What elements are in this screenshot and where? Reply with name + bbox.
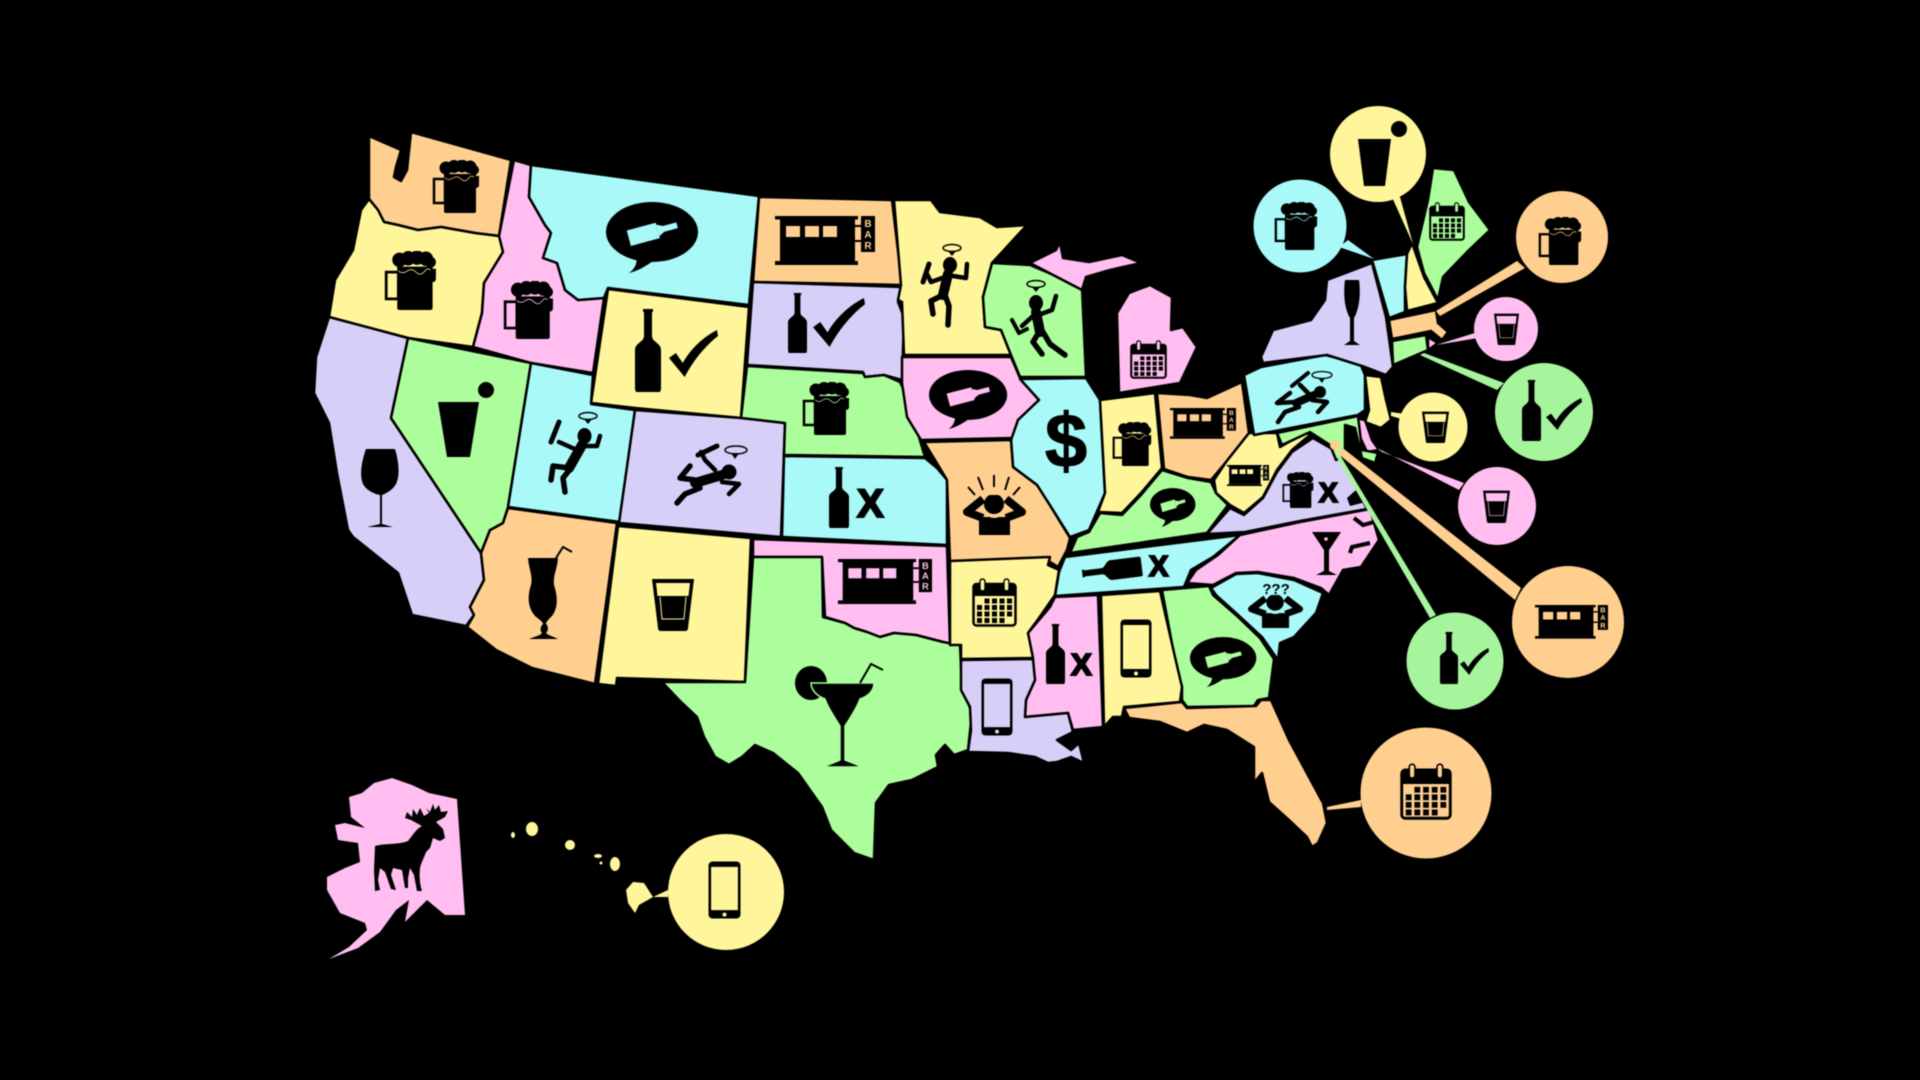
state: Oklahoma, bar: A — [922, 571, 929, 581]
callout: Connecticut, bottle check — [1420, 353, 1593, 461]
callout: Rhode Island, shot — [1436, 297, 1538, 361]
state: New York, flute — [1261, 263, 1393, 375]
state: Texas, margarita — [662, 557, 972, 860]
state: Nevada, pint with dot — [391, 338, 531, 553]
state: Michigan upper peninsula — [1030, 242, 1141, 290]
state: Tennessee, bottle and x — [1055, 535, 1240, 596]
state: Delaware — [1355, 418, 1379, 452]
state: Mississippi, bottle and x — [1025, 595, 1103, 730]
state: New Jersey — [1365, 375, 1391, 428]
state: Ohio, bar: B — [1229, 410, 1234, 417]
state: Maryland — [1277, 416, 1378, 463]
state: Ohio, bar — [1157, 382, 1249, 480]
state: New Hampshire — [1405, 243, 1438, 311]
callout: Massachusetts, beer — [1436, 191, 1608, 316]
state: Hawaii islands — [511, 822, 653, 913]
state: West Virginia, bar: R — [1265, 475, 1268, 480]
state: Virginia, beer and x: X — [1319, 477, 1338, 508]
state: North Dakota, bar: A — [864, 230, 872, 241]
map of the contiguous United States — [314, 132, 1490, 860]
state: Alabama, phone — [1101, 591, 1182, 727]
callout: District of Columbia, bar: A — [1600, 614, 1606, 622]
state: Georgia, speech bubble — [1162, 586, 1274, 707]
state: South Carolina, confused figure — [1211, 573, 1323, 660]
callout: Florida, calendar — [1327, 728, 1492, 858]
state: Kansas, bottle and x: X — [857, 482, 884, 526]
state: North Dakota, bar — [753, 197, 902, 285]
state: Oklahoma, bar: R — [922, 581, 929, 591]
state: Washington, beer — [369, 132, 511, 236]
state: Nebraska, beer — [741, 366, 925, 457]
state: Maine, calendar — [1417, 168, 1490, 300]
state: West Virginia, bar: B — [1265, 466, 1268, 471]
state: West Virginia, bar — [1214, 432, 1310, 513]
state: Montana, speech bubble — [529, 165, 759, 305]
state: Arizona, hurricane glass — [467, 508, 617, 684]
state: Alaska, moose — [327, 778, 465, 959]
state: Pennsylvania, drunk figure — [1244, 355, 1365, 435]
callout: District of Columbia, bar — [1336, 449, 1624, 678]
state: Kansas, bottle and x — [782, 456, 947, 545]
state: Oregon, beer — [329, 199, 503, 347]
state: Florida — [1124, 700, 1327, 847]
state: Ohio, bar: R — [1229, 424, 1234, 431]
state: Vermont — [1372, 254, 1407, 318]
callout: Hawaii, phone — [653, 834, 784, 950]
callout: Vermont, beer — [1254, 180, 1374, 272]
state: Kentucky, speech bubble — [1070, 470, 1228, 553]
state: Idaho, beer — [473, 160, 604, 373]
state: Tennessee, bottle and x: X — [1149, 551, 1169, 583]
state: Indiana, beer — [1098, 393, 1162, 513]
state: Wyoming, bottle check — [591, 289, 749, 418]
state: Ohio, bar: A — [1229, 417, 1234, 424]
callout: New Hampshire, pint with dot — [1330, 106, 1426, 244]
state: Arkansas, calendar — [950, 557, 1059, 659]
state: Oklahoma, bar: B — [922, 561, 929, 571]
state: North Dakota, bar: B — [864, 219, 872, 230]
callout: District of Columbia, bar: B — [1600, 607, 1606, 615]
callout: New Jersey, shot — [1391, 392, 1468, 462]
state: Rhode Island — [1428, 337, 1438, 350]
state: Michigan lower peninsula, calendar — [1117, 285, 1197, 393]
state: Louisiana, phone — [961, 659, 1084, 763]
state: North Dakota, bar: R — [864, 241, 872, 252]
state: Massachusetts — [1389, 310, 1448, 340]
state: Utah, drunk figure — [508, 363, 635, 522]
state: South Dakota, bottle check — [747, 282, 904, 380]
callout: Maryland, bottle check — [1336, 455, 1504, 710]
state: Illinois, dollar sign — [1011, 378, 1105, 537]
state: Wisconsin, drunk figure — [983, 263, 1086, 377]
state: Colorado, drunk figure — [619, 410, 785, 537]
state: Illinois, dollar sign: $ — [1045, 399, 1087, 484]
state: Missouri, distressed figure — [924, 440, 1070, 567]
state: Connecticut — [1392, 335, 1428, 365]
callout: Delaware, shot — [1377, 448, 1536, 545]
marker: District of Columbia — [1330, 440, 1340, 450]
state: Virginia, beer and x — [1207, 438, 1367, 534]
state: South Carolina, confused figure: ??? — [1262, 581, 1290, 598]
state: Minnesota, drunk figure — [894, 200, 1027, 355]
state: Mississippi, bottle and x: X — [1071, 647, 1092, 682]
state: California, wine — [314, 317, 484, 626]
state: Oklahoma, bar — [753, 539, 950, 645]
state: West Virginia, bar: A — [1265, 470, 1268, 475]
state: North Carolina, martini — [1187, 509, 1379, 595]
state: New Mexico, shot — [598, 526, 751, 686]
state: Iowa, speech bubble — [902, 357, 1039, 440]
callout: District of Columbia, bar: R — [1600, 622, 1606, 630]
